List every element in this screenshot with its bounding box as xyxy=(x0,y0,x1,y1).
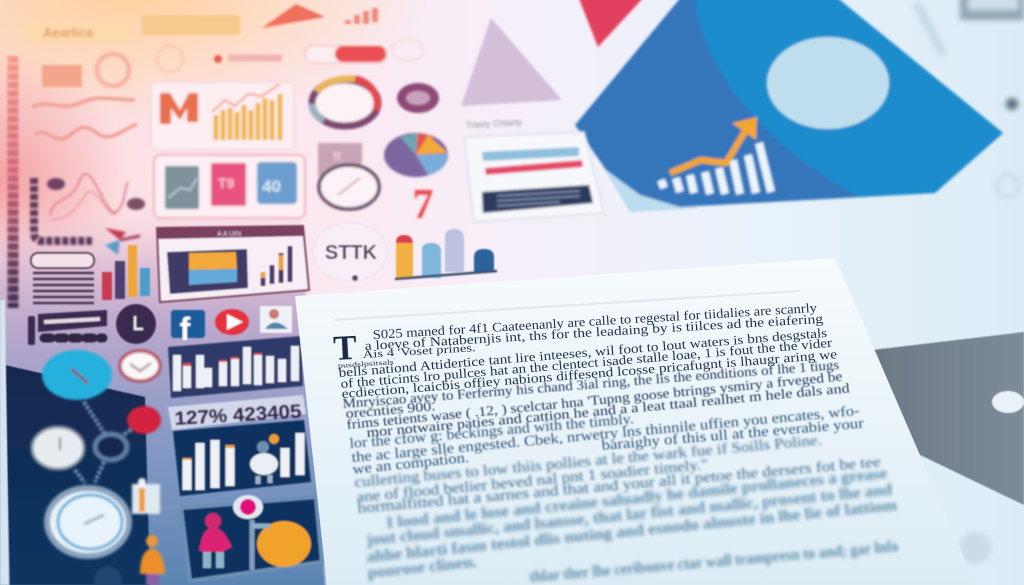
panel box: phones xyxy=(154,155,305,218)
connector chain xyxy=(75,402,180,510)
most blurred text lines: I lood and le lose and creaine saluadly he damile prollaneces a grease xyxy=(386,465,888,532)
small purple ellipse xyxy=(397,83,439,113)
panel: timeline on navy xyxy=(32,350,180,585)
dark blue sector xyxy=(575,0,1003,207)
orange circle xyxy=(257,521,311,567)
dark blob xyxy=(94,566,122,585)
red triangle xyxy=(578,0,645,47)
purple triangle xyxy=(461,18,562,106)
faint pill xyxy=(918,6,942,52)
toggle pill xyxy=(305,46,387,63)
small bar icon xyxy=(132,478,160,514)
most blurred text lines: ahhe hlarti fasm testol dlis nuting and esnodo alnuste in lhe lie of lattiom xyxy=(366,497,899,566)
STTK bubble: STTK xyxy=(325,242,378,264)
number panel: 127% 423405 xyxy=(174,401,303,430)
small ring xyxy=(157,46,183,72)
icon: facebook: f xyxy=(180,311,191,347)
panel: device row and clock xyxy=(28,304,322,581)
more blurred text lines: ane of flood betlier beved nal pnt 1 soadier timely." xyxy=(356,457,709,506)
fan icon xyxy=(105,228,140,255)
line chart xyxy=(34,174,145,241)
blurred text lines: we an compation. xyxy=(352,450,470,478)
rounded bars xyxy=(395,229,497,279)
panel: poster mid-left graphics xyxy=(31,223,497,303)
panel: paper sheet xyxy=(295,258,976,585)
number panel xyxy=(168,395,306,430)
small ring xyxy=(95,434,127,460)
panel: grey card xyxy=(872,332,1024,505)
clock with banner xyxy=(318,143,379,209)
cyan circle xyxy=(42,350,112,400)
panel: poster upper icons xyxy=(13,4,448,308)
blurred text lines: the ac large slle engested. Cbek, nrwetry lns thinnile uffien you encates, wfo- xyxy=(351,403,860,466)
bar panel xyxy=(168,336,303,398)
STTK bubble xyxy=(313,223,387,281)
sharp text lines: S025 maned for 4f1 Caateenanly are calle to regestal for tiidalies are scanrly xyxy=(372,300,818,342)
sharp text lines xyxy=(338,300,838,401)
person pink xyxy=(199,513,232,568)
panel: upper-right blue pie graphic xyxy=(575,0,1003,212)
small bars xyxy=(348,8,375,24)
title label left xyxy=(25,22,130,42)
dark navy backing xyxy=(5,365,150,585)
window dashboard: A A UIN xyxy=(217,231,241,238)
device xyxy=(28,310,107,345)
window dashboard xyxy=(157,226,309,302)
grey device xyxy=(960,0,1024,20)
orange block xyxy=(42,65,82,87)
ring gauge xyxy=(312,79,378,126)
faint circle lower right xyxy=(959,532,991,564)
sharp text lines: of the tticints lro pullces hat an the clentect isade stalle loae, 1 is fout the the vider xyxy=(340,335,833,391)
top rule xyxy=(334,291,800,320)
panel: purple triangle and bars card xyxy=(461,18,604,222)
icon: person card xyxy=(260,306,292,333)
small clock xyxy=(32,427,84,469)
icon: play xyxy=(215,309,249,335)
more blurred text lines xyxy=(354,433,882,517)
blurred text lines xyxy=(349,403,865,478)
light blue shadow wedge xyxy=(580,128,700,212)
faint ring xyxy=(997,175,1019,197)
panel box: phones: 40 xyxy=(262,177,281,196)
big seven: 7 xyxy=(412,182,434,228)
small outlined circle xyxy=(392,39,424,61)
red mountain xyxy=(262,4,325,28)
bright blue sector xyxy=(695,0,1003,197)
legend card xyxy=(464,132,604,222)
red dot label xyxy=(214,55,282,63)
slightly soft text lines: Mnryiscao avey to Ferfermy his chand 3ial ring, the lis the eonditions of lhe 1 tiugs xyxy=(342,357,840,411)
dark dot xyxy=(1006,98,1018,110)
orange person xyxy=(140,535,165,585)
most blurred text lines: jout cloud smallic, and lsansse, that lar fist and mallic, prosent to lhe and xyxy=(365,481,893,549)
more blurred text lines: hormalfitted hat a sarnes and that and your all it petoe the dersers fot be tee xyxy=(357,454,882,517)
light ellipse xyxy=(767,37,889,129)
sharp text lines: pusdslpsitsals xyxy=(338,358,394,370)
sharp text lines: a loeve of Natabernjis int, ths for the leadaing by is tiilces ad the eiafering xyxy=(364,311,824,353)
M icon xyxy=(160,93,198,124)
wave lines xyxy=(32,98,137,139)
search pill xyxy=(31,253,94,268)
clock dark xyxy=(116,304,156,344)
left light edge xyxy=(0,300,9,585)
more blurred text lines: cullerting buses to low thiis pollies at le the wark fue if Soills Poline. xyxy=(354,433,822,491)
growth arrow and bars xyxy=(661,117,771,194)
text rows xyxy=(33,273,94,303)
blurred text lines: baraighy of this ull at the everabie your xyxy=(601,416,865,454)
panel: poster lower lavender section xyxy=(0,205,326,585)
bar group xyxy=(102,245,150,300)
slightly soft text lines xyxy=(342,357,850,440)
panel box: phones: T9 xyxy=(218,175,235,191)
red dot xyxy=(127,406,161,434)
slightly soft text lines: mor notwaire paties and cattion he and a a leat ttaal realhet m hele dals and xyxy=(366,380,850,440)
white dot xyxy=(992,391,1024,413)
clock with banner: !! xyxy=(333,149,341,163)
most blurred text lines xyxy=(365,465,899,585)
drop cap: T xyxy=(332,328,358,368)
sharp text lines: bells nationd Attidertice tant lire inteeses, wil foot to lout waters is bns desgstals xyxy=(338,325,828,380)
slightly soft text lines: frims tetients wase ( .12, ) scelctar hna 'Tupng goose btrings ysmiry a frveged be xyxy=(346,368,843,432)
big clock xyxy=(47,488,129,556)
vertical segmented strip xyxy=(8,56,18,308)
small gauge xyxy=(97,54,129,86)
pin dot xyxy=(233,495,263,570)
sharp text lines: ecdiection, lcaicbis offiey nabions diffesend lcosse pricafugnt is lhaugr aring we xyxy=(341,346,838,401)
most blurred text lines: ponrose clinen. xyxy=(367,554,478,582)
panel box: bars xyxy=(151,82,294,150)
dark bars panel xyxy=(173,420,311,496)
caption: Trasty Chtarty xyxy=(466,117,523,130)
title label right xyxy=(142,15,240,35)
panel: top-right faint icons xyxy=(918,0,1024,197)
title label left: Aearlice xyxy=(43,25,94,40)
person panel xyxy=(181,495,322,581)
icon: facebook xyxy=(171,310,205,347)
white clock xyxy=(120,351,160,381)
most blurred text lines: thlar ther lhe ceribonve ctar wall trampresn to and; gar lnfo xyxy=(529,538,899,585)
slightly soft text lines: orecnties 900. xyxy=(345,398,436,421)
yellow bars xyxy=(216,94,280,140)
pie chart xyxy=(384,133,448,177)
blurred text lines: lor the cfow g: beckings and with the timbly. xyxy=(349,411,634,452)
sharp text lines: Ais 4 'Voset prines. xyxy=(362,342,476,361)
